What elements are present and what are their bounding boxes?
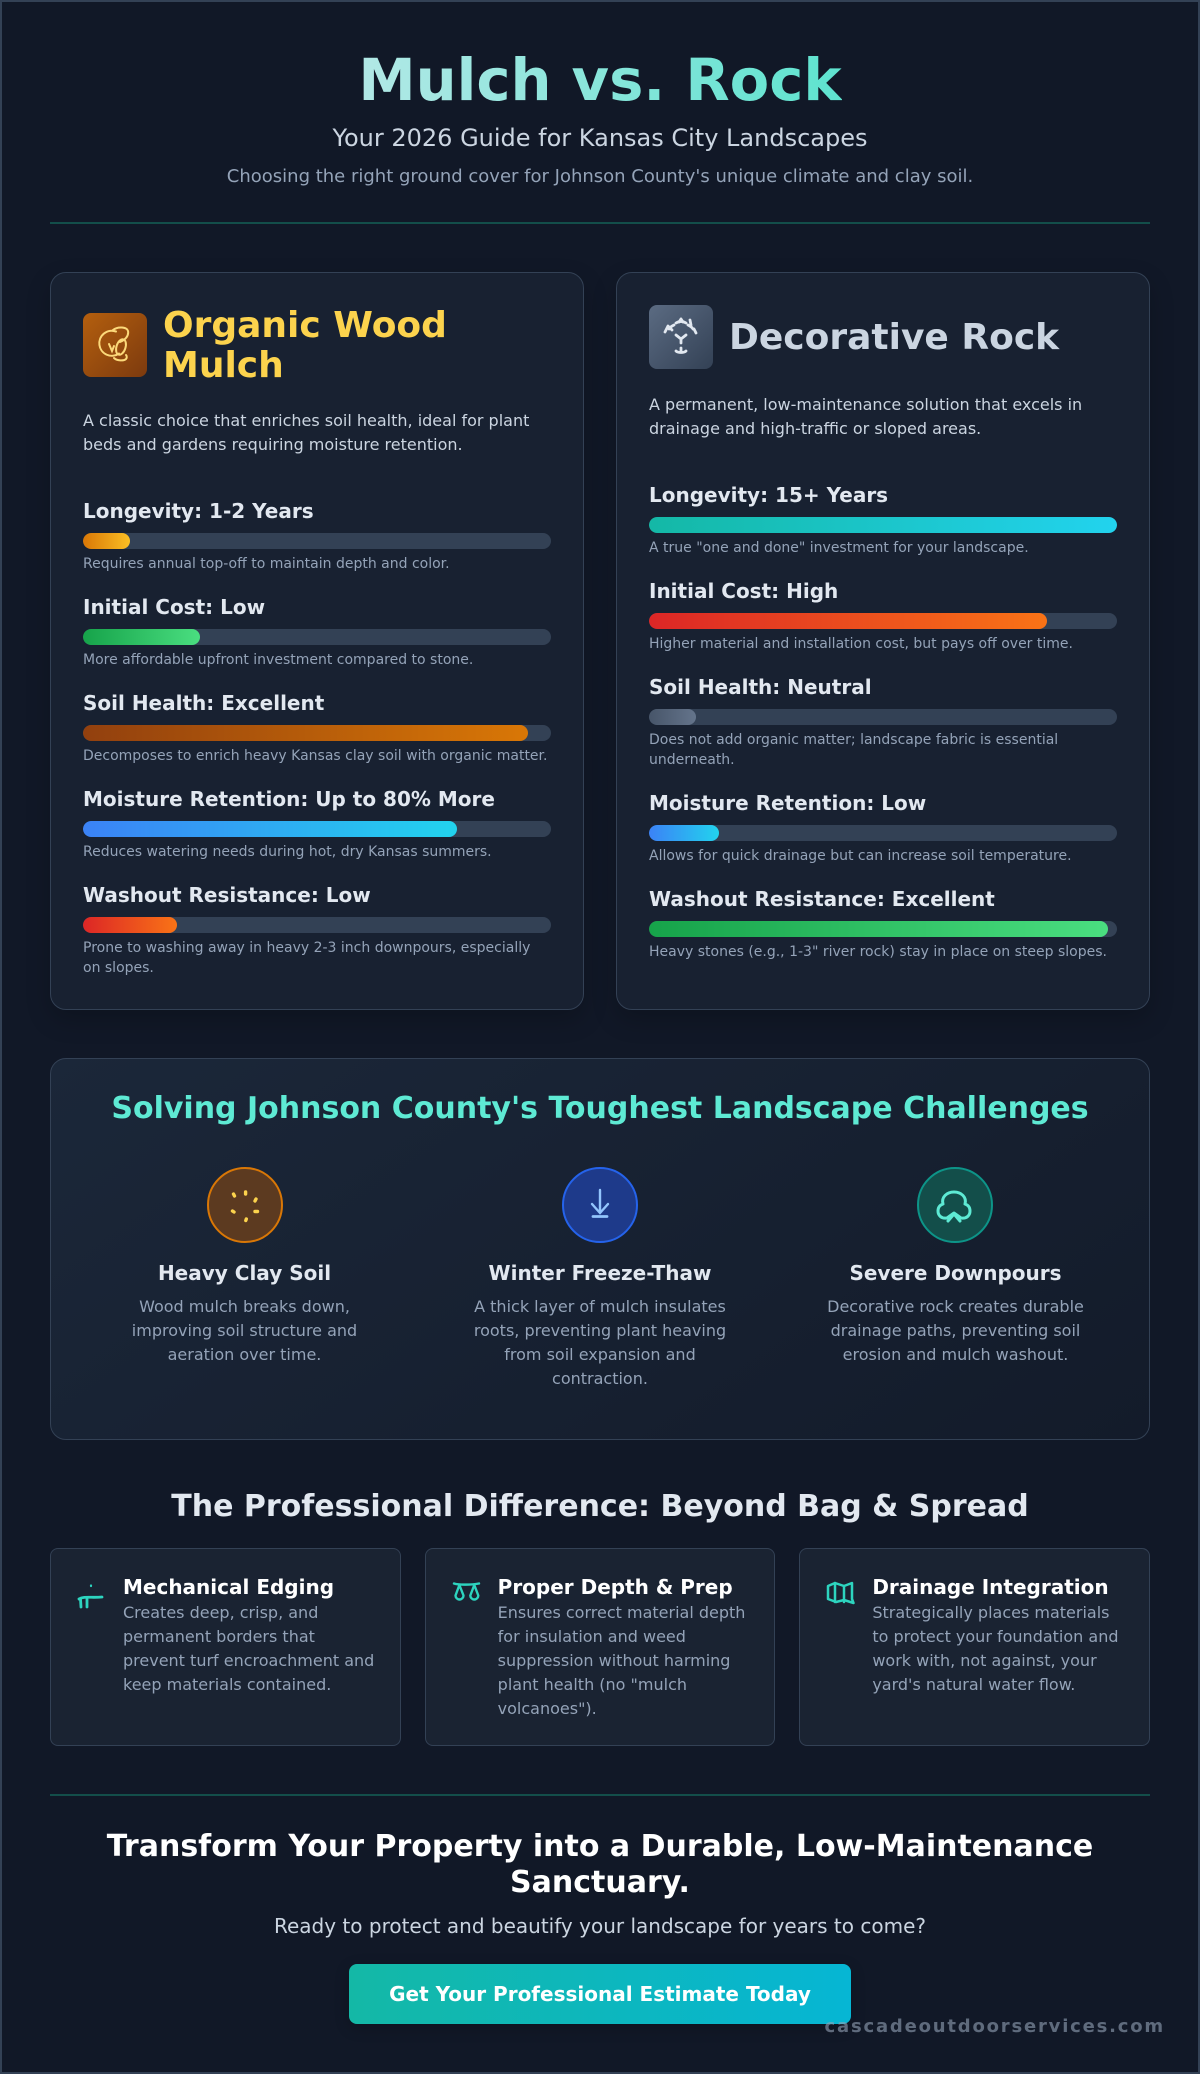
icon: freeze-thaw <box>562 1167 638 1243</box>
closing heading <box>106 1829 1093 1900</box>
icon: clay soil <box>206 1167 282 1243</box>
drainage text: work with, not against, your <box>872 1651 1097 1670</box>
drainage text: yard's natural water flow. <box>872 1675 1075 1694</box>
panel: decorative rock <box>616 272 1150 1010</box>
metric: soil health <box>83 691 551 764</box>
mulch heading <box>163 305 447 386</box>
icon: map <box>826 1582 855 1604</box>
section heading: professional difference: The Professional Difference: Beyond Bag & Spread <box>171 1489 1029 1524</box>
rock description: A permanent, low-maintenance solution that excels in <box>649 395 1082 414</box>
challenge: severe downpours <box>827 1167 1084 1364</box>
edging text: permanent borders that <box>123 1627 315 1646</box>
drainage text <box>872 1603 1118 1694</box>
metric: longevity: Longevity: 15+ Years <box>649 483 888 507</box>
call to action button: Get Your Professional Estimate Today <box>389 1982 811 2006</box>
mulch header <box>83 305 447 386</box>
panel: landscape challenges <box>50 1058 1150 1440</box>
icon: downpours <box>917 1167 993 1243</box>
metric: initial cost <box>649 579 1117 652</box>
website watermark: cascadeoutdoorservices.com <box>825 2016 1165 2037</box>
metric: washout resistance <box>649 887 1117 960</box>
metric: moisture retention: Moisture Retention: Low <box>649 791 926 815</box>
depth text: plant health (no "mulch <box>498 1675 687 1694</box>
metric: moisture retention <box>83 787 551 860</box>
metric: soil health: Soil Health: Excellent <box>83 691 324 715</box>
depth text: for insulation and weed <box>498 1627 686 1646</box>
rock header <box>649 305 1060 369</box>
closing subtext: Ready to protect and beautify your landscape for years to come? <box>274 1914 926 1938</box>
rock heading: Decorative Rock <box>729 317 1059 358</box>
freeze-thaw text <box>474 1297 726 1388</box>
freeze-thaw text: contraction. <box>552 1369 648 1388</box>
metric: longevity: Requires annual top-off to maintain depth and color. <box>83 556 450 572</box>
challenge: winter freeze-thaw <box>474 1167 726 1388</box>
drainage text: to protect your foundation and <box>872 1627 1118 1646</box>
rock description: drainage and high-traffic or sloped areas. <box>649 419 981 438</box>
metric: soil health: Decomposes to enrich heavy Kansas clay soil with organic matter. <box>83 748 547 764</box>
drainage title: Drainage Integration <box>872 1575 1109 1599</box>
metric: washout resistance: on slopes. <box>83 960 154 976</box>
freeze-thaw title: Winter Freeze-Thaw <box>489 1261 711 1285</box>
depth text <box>498 1603 745 1718</box>
metric: initial cost <box>83 595 551 668</box>
metric: initial cost: Higher material and installation cost, but pays off over time. <box>649 636 1073 652</box>
metric: initial cost: More affordable upfront investment compared to stone. <box>83 652 473 668</box>
downpours text <box>827 1297 1084 1364</box>
icon: edging <box>78 1584 104 1608</box>
mulch heading: Organic Wood <box>163 305 447 346</box>
tagline: Choosing the right ground cover for Johnson County's unique climate and clay soil. <box>227 166 973 187</box>
clay soil text: Wood mulch breaks down, <box>139 1297 350 1316</box>
metric: soil health: Does not add organic matter; landscape fabric is essential <box>649 732 1058 748</box>
metric: moisture retention: Reduces watering needs during hot, dry Kansas summers. <box>83 844 492 860</box>
metric: soil health: Soil Health: Neutral <box>649 675 872 699</box>
metric: initial cost: Initial Cost: High <box>649 579 838 603</box>
call to action button <box>349 1964 851 2024</box>
downpours text: erosion and mulch washout. <box>843 1345 1068 1364</box>
challenges heading: Solving Johnson County's Toughest Landscape Challenges <box>111 1091 1089 1126</box>
metric: washout resistance: Washout Resistance: Excellent <box>649 887 995 911</box>
metric: washout resistance: Washout Resistance: Low <box>83 883 371 907</box>
metric: washout resistance: Heavy stones (e.g., 1-3" river rock) stay in place on steep slopes. <box>649 944 1107 960</box>
freeze-thaw text: roots, preventing plant heaving <box>474 1321 726 1340</box>
depth text: volcanoes"). <box>498 1699 597 1718</box>
metric: longevity <box>649 483 1117 556</box>
downpours title: Severe Downpours <box>849 1261 1062 1285</box>
title: Mulch vs. Rock <box>358 47 842 114</box>
clay soil text <box>132 1297 357 1364</box>
downpours text: Decorative rock creates durable <box>827 1297 1084 1316</box>
rock description <box>649 395 1082 438</box>
card: mechanical edging <box>50 1548 401 1746</box>
freeze-thaw text: A thick layer of mulch insulates <box>474 1297 726 1316</box>
icon: mulch <box>83 313 147 377</box>
card: drainage integration <box>799 1548 1150 1746</box>
drainage text: Strategically places materials <box>872 1603 1110 1622</box>
challenge: heavy clay soil <box>132 1167 357 1364</box>
metric: longevity: Longevity: 1-2 Years <box>83 499 314 523</box>
metric: washout resistance <box>83 883 551 976</box>
mulch description <box>83 411 529 454</box>
edging text: keep materials contained. <box>123 1675 331 1694</box>
metric: soil health: underneath. <box>649 752 735 768</box>
icon: scales <box>452 1582 480 1601</box>
edging text: prevent turf encroachment and <box>123 1651 374 1670</box>
clay soil text: aeration over time. <box>168 1345 321 1364</box>
metric: moisture retention <box>649 791 1117 864</box>
edging text: Creates deep, crisp, and <box>123 1603 318 1622</box>
metric: moisture retention: Allows for quick drainage but can increase soil temperature. <box>649 848 1072 864</box>
panel: organic wood mulch <box>50 272 584 1010</box>
metric: longevity <box>83 499 551 572</box>
edging title: Mechanical Edging <box>123 1575 334 1599</box>
clay soil title: Heavy Clay Soil <box>158 1261 331 1285</box>
downpours text: drainage paths, preventing soil <box>831 1321 1080 1340</box>
metric: longevity: A true "one and done" investment for your landscape. <box>649 540 1029 556</box>
mulch description: A classic choice that enriches soil health, ideal for plant <box>83 411 529 430</box>
depth text: Ensures correct material depth <box>498 1603 745 1622</box>
mulch description: beds and gardens requiring moisture retention. <box>83 435 463 454</box>
depth text: suppression without harming <box>498 1651 730 1670</box>
metric: washout resistance: Prone to washing away in heavy 2-3 inch downpours, especially <box>83 940 530 956</box>
closing heading: Sanctuary. <box>510 1865 690 1900</box>
metric: initial cost: Initial Cost: Low <box>83 595 265 619</box>
icon: rock <box>649 305 713 369</box>
clay soil text: improving soil structure and <box>132 1321 357 1340</box>
freeze-thaw text: from soil expansion and <box>504 1345 696 1364</box>
mulch heading: Mulch <box>163 345 284 386</box>
depth title: Proper Depth & Prep <box>498 1575 733 1599</box>
edging text <box>123 1603 374 1694</box>
closing heading: Transform Your Property into a Durable, Low-Maintenance <box>107 1829 1093 1864</box>
metric: soil health <box>649 675 1117 768</box>
card: proper depth and prep <box>425 1548 775 1746</box>
metric: moisture retention: Moisture Retention: Up to 80% More <box>83 787 495 811</box>
subtitle: Your 2026 Guide for Kansas City Landscapes <box>332 124 867 152</box>
